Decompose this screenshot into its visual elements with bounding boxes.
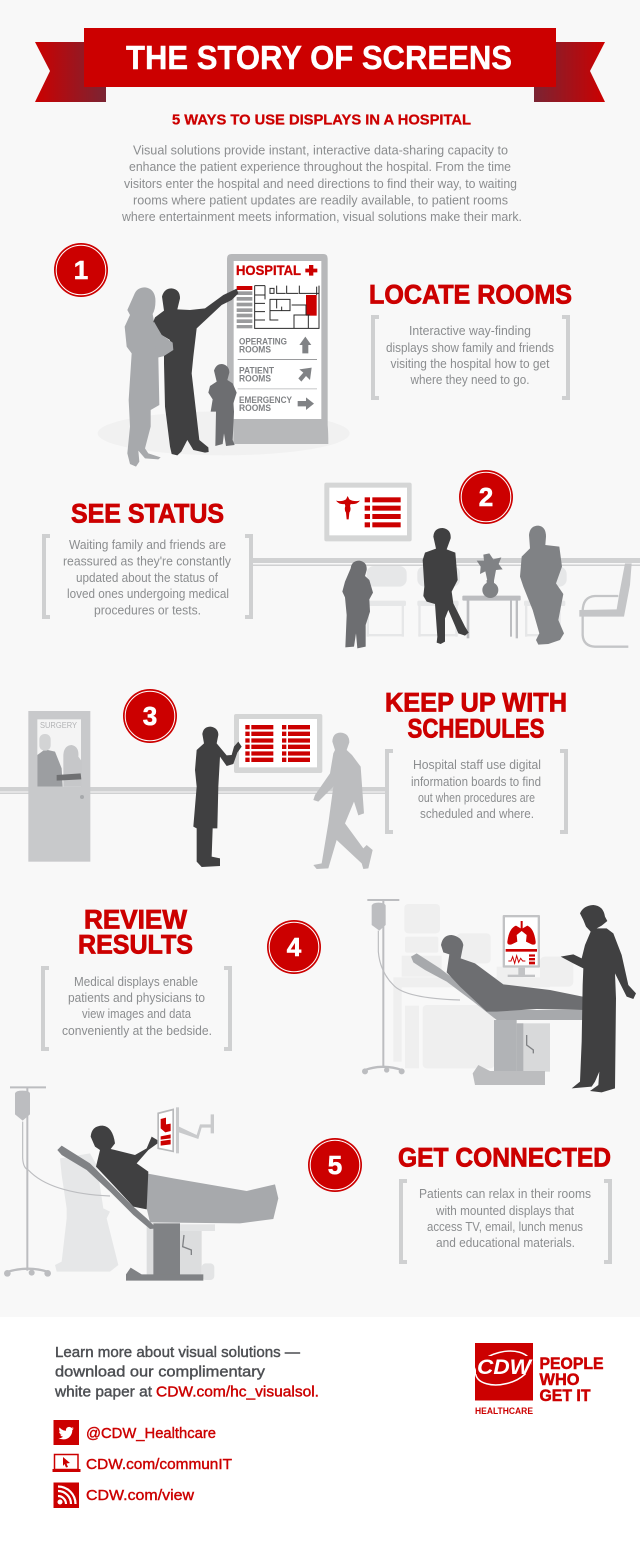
bed deck [411,953,583,1020]
section 5 brackets [401,1181,610,1262]
child silhouette [208,364,237,446]
section 1 heading: LOCATE ROOMS [369,280,572,310]
CDW logo: CDW [477,1356,533,1379]
number badge 1 [54,243,108,297]
man silhouette [153,288,238,455]
number badge 2 [459,470,513,524]
number badge 2: 2 [479,482,493,512]
kiosk body [227,254,328,444]
section 4 body: patients and physicians to [68,991,205,1005]
section 5 body: Patients can relax in their rooms [419,1187,591,1201]
arrow right [298,397,314,410]
kiosk room labels [239,336,293,414]
icon: RSS [54,1482,79,1508]
wall-mounted display [157,1107,214,1153]
status list [365,497,401,527]
kiosk cross [305,265,317,276]
floor plan map [255,286,319,328]
section 2 body: Waiting family and friends are [69,538,226,552]
dialysis machine [55,1153,118,1272]
section 2 body: reassured as they're constantly [63,554,232,568]
section 2 body [63,538,232,618]
banner face [84,28,556,87]
section 3 body: out when procedures are [418,791,535,805]
wall rail [253,558,640,566]
illustration: doctor reviews results at bedside [362,900,636,1092]
kiosk room labels: PATIENT [239,366,274,376]
menu buttons [237,286,252,328]
kiosk screen [234,261,321,419]
potted plant [477,553,503,598]
caduceus icon [336,496,360,519]
twitter handle: @CDW_Healthcare [86,1425,216,1442]
section 4 heading: REVIEW [84,904,187,934]
IV stand [4,1087,110,1277]
nurse silhouette [561,905,636,1092]
intro paragraph: enhance the patient experience throughout the hospital. From the time [129,160,511,174]
IV stand [362,900,460,1074]
patient silhouette [91,1126,160,1209]
CDW logo [472,1343,604,1417]
section 1 brackets [373,317,568,398]
number badge 4 [267,920,321,974]
door label: SURGERY [40,720,77,730]
section 5 body: and educational materials. [436,1236,575,1250]
kiosk heading: HOSPITAL [236,263,301,278]
icon: laptop [52,1454,80,1472]
section 3 brackets [387,751,566,832]
illustration: family at way-finding kiosk [98,254,350,467]
icon: twitter [54,1420,79,1445]
banner right tail [534,42,605,102]
corridor rail [0,787,386,794]
section 5 heading: GET CONNECTED [398,1142,611,1172]
section 5 body: with mounted displays that [435,1204,574,1218]
call to action text: white paper at [54,1384,152,1400]
waiting chairs [367,566,567,637]
schedule board [234,714,322,773]
intro paragraph [121,144,522,224]
bed base [126,1223,215,1281]
woman arm over man [153,322,173,357]
illustration: waiting room [324,483,632,648]
empty chair [579,563,632,647]
seated woman [423,528,469,644]
section 4 body: view images and data [82,1007,191,1021]
kiosk room labels: EMERGENCY [239,395,293,406]
section 2 body: procedures or tests. [94,604,201,618]
section 3 body: Hospital staff use digital [413,758,541,772]
section 2 brackets [44,536,251,617]
surgeons in window [37,734,82,787]
view link: CDW.com/view [86,1487,194,1504]
call to action text: download our complimentary [55,1364,266,1380]
section 5 body [419,1187,591,1250]
illustration: staff at schedule board [28,711,373,869]
patient [441,935,583,1012]
intro paragraph: where entertainment meets information, visual solutions make their mark. [121,210,522,224]
section 2 body: loved ones undergoing medical [67,587,229,601]
section 1 body: displays show family and friends [386,341,554,355]
CDW logo: GET IT [540,1387,590,1405]
intro paragraph: rooms where patient updates are readily available, to patient rooms [133,194,508,208]
title: THE STORY OF SCREENS [126,39,512,76]
CDW logo: PEOPLE [540,1355,604,1373]
kiosk room labels: OPERATING [239,336,287,348]
section 2 body: updated about the status of [76,571,218,585]
number badge 5 [308,1138,362,1192]
intro paragraph: Visual solutions provide instant, interactive data-sharing capacity to [133,144,508,158]
CDW logo: HEALTHCARE [475,1406,533,1417]
section 1 body: where they need to go. [410,373,530,387]
subtitle: 5 WAYS TO USE DISPLAYS IN A HOSPITAL [172,112,471,128]
community link: CDW.com/communIT [86,1456,232,1473]
title banner [35,28,605,102]
standing child [342,561,373,648]
section 3 heading [385,688,567,744]
section 3 body [411,758,541,821]
kiosk room labels: ROOMS [239,374,271,384]
section 1 body: visiting the hospital how to get [390,357,550,371]
section 3 body: scheduled and where. [420,807,534,821]
footer panel [0,1317,640,1550]
section 5 illustration: patient using mounted display [4,1087,278,1281]
bed deck [57,1146,157,1229]
call to action text: Learn more about visual solutions — [55,1345,301,1361]
number badge 1: 1 [74,255,88,285]
section 3 body: information boards to find [411,775,541,789]
arrow up [299,337,311,353]
door handle [80,795,84,799]
door window [37,719,81,787]
woman silhouette [125,287,173,467]
banner left tail [35,42,106,102]
number badge 3: 3 [143,701,157,731]
kiosk room labels: ROOMS [239,403,271,414]
section 3 heading: SCHEDULES [408,714,544,744]
background equipment [393,904,573,1068]
doctor silhouette [193,727,242,867]
section 4 body: Medical displays enable [74,975,198,989]
lungs icon [507,921,536,945]
seated man [520,526,564,645]
section 4 heading [78,904,193,960]
section 4 body [62,975,212,1038]
section 1 body: Interactive way-finding [409,324,531,338]
CDW logo: WHO [540,1371,580,1389]
side table [462,596,521,638]
number badge 4: 4 [287,932,302,962]
section 4 heading: RESULTS [78,930,193,960]
section 4 body: conveniently at the bedside. [62,1024,212,1038]
kiosk room labels: ROOMS [239,344,271,356]
section 3 heading: KEEP UP WITH [385,688,567,718]
call to action text [54,1345,319,1400]
section 5 body: access TV, email, lunch menus [427,1220,583,1234]
section 4 brackets [43,968,230,1049]
surgery door [28,711,90,862]
vital signs trace [508,956,525,963]
number badge 3 [123,689,177,743]
walking person silhouette [313,733,373,869]
call to action text: CDW.com/hc_visualsol. [156,1384,319,1400]
bed base [473,1020,550,1085]
section 2 heading: SEE STATUS [71,498,224,528]
arrow north-east [298,368,312,382]
floor shadow [98,411,350,455]
sign dividers [238,359,317,360]
section 1 body [386,324,554,387]
number badge 5: 5 [328,1150,342,1180]
blanket [147,1173,278,1223]
status monitor [324,483,412,541]
intro paragraph: visitors enter the hospital and need directions to find their way, to waiting [124,177,517,191]
lung monitor [503,915,540,977]
